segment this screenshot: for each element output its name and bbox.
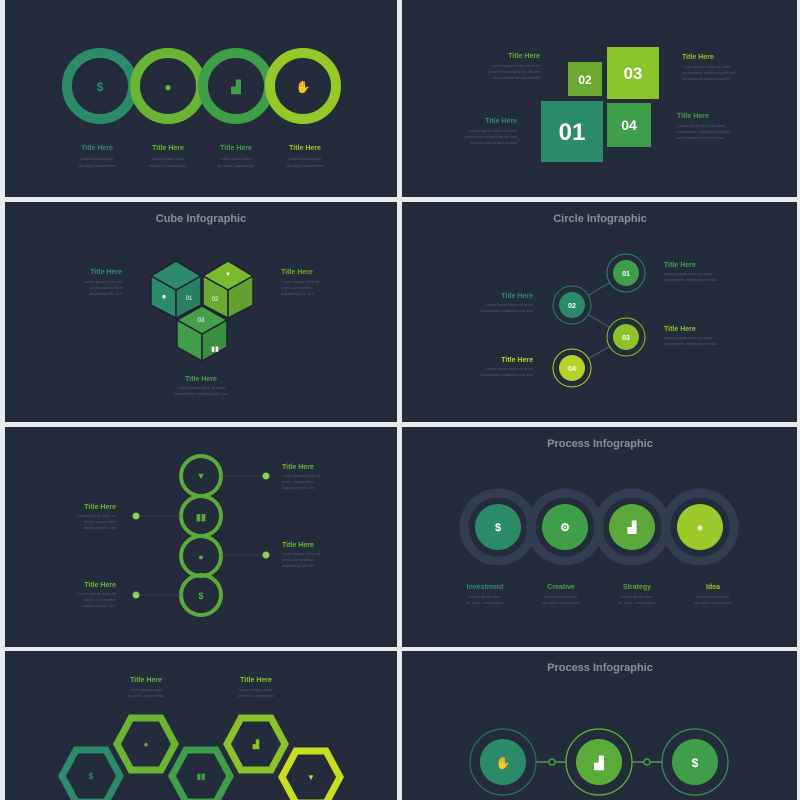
labels: Lorem ipsum dolor xyxy=(151,156,185,161)
labels: sit amet, consectetur xyxy=(467,600,504,605)
panel: hexagons: $ xyxy=(89,772,94,781)
labels: sit amet, consectetur xyxy=(543,600,580,605)
panel: cube infographic: ▮▮ xyxy=(211,346,219,353)
labels: Creative xyxy=(547,584,575,591)
labels: Idea xyxy=(706,584,720,591)
labels: Title Here xyxy=(81,145,113,152)
panel: hexagons: ▮▮ xyxy=(197,772,205,781)
text blocks xyxy=(84,269,320,396)
text blocks: Lorem ipsum dolor sit xyxy=(282,473,321,478)
panel: circle chain xyxy=(5,0,397,197)
squares xyxy=(568,62,602,96)
text blocks: Lorem ipsum dolor sit xyxy=(78,591,117,596)
text blocks: Title Here xyxy=(664,262,696,269)
text blocks: Title Here xyxy=(90,269,122,276)
panel: circle infographic: 01 xyxy=(622,271,630,278)
text blocks: consectetur adipiscing elit sed xyxy=(487,69,540,74)
text blocks: consectetur adipiscing elit sed xyxy=(664,341,717,346)
text blocks: Lorem ipsum dolor sit amet xyxy=(485,302,534,307)
icons: ▟ xyxy=(230,79,241,95)
panel: process infographic 2: ✋ xyxy=(496,756,510,770)
text blocks: Lorem ipsum dolor sit amet xyxy=(485,366,534,371)
text blocks: Title Here xyxy=(677,113,709,120)
labels: sit amet, consectetur xyxy=(79,163,116,168)
circles xyxy=(470,729,728,795)
labels: Lorem ipsum dolor xyxy=(288,156,322,161)
text blocks xyxy=(78,464,321,608)
panel: process infographic: ● xyxy=(697,522,703,534)
panel: vertical chain: ▼ xyxy=(197,471,205,481)
text blocks: consectetur adipiscing elit, sed xyxy=(174,391,228,396)
panel: hexagons: ▟ xyxy=(252,739,260,750)
panel: circle infographic: 03 xyxy=(622,335,630,342)
panel: vertical chain: $ xyxy=(198,591,204,601)
labels: sit amet, consectetur xyxy=(619,600,656,605)
labels: Lorem ipsum dolor xyxy=(80,156,114,161)
panel: square grid: 02 xyxy=(578,73,592,87)
labels: sit amet, consectetur xyxy=(150,163,187,168)
text blocks: Title Here xyxy=(282,464,314,471)
panel: cube infographic: 02 xyxy=(212,297,219,303)
labels: Lorem ipsum dolor xyxy=(544,594,578,599)
panel: circle infographic: 04 xyxy=(568,366,576,373)
labels: sit amet, consectetur xyxy=(218,163,255,168)
panel: circle infographic xyxy=(402,202,797,422)
text blocks: consectetur adipiscing elit sed xyxy=(664,277,717,282)
text blocks: amet, consectetur xyxy=(281,285,313,290)
text blocks: sit amet, consectetur xyxy=(238,693,275,698)
text blocks: Lorem ipsum dolor sit amet xyxy=(677,123,726,128)
icons: ● xyxy=(164,80,172,94)
panel: cube infographic: 03 xyxy=(198,318,205,324)
labels: Title Here xyxy=(152,145,184,152)
panel: square grid: 04 xyxy=(621,117,637,133)
text blocks: consectetur adipiscing elit sed xyxy=(682,70,735,75)
panel: process infographic: ▟ xyxy=(627,520,637,534)
labels: Lorem ipsum dolor xyxy=(219,156,253,161)
text blocks: amet, consectetur xyxy=(84,519,117,524)
text blocks: Title Here xyxy=(84,504,116,511)
text blocks: amet, consectetur xyxy=(90,285,123,290)
chain rings xyxy=(181,456,221,615)
labels: Lorem ipsum dolor xyxy=(696,594,730,599)
text blocks: Lorem ipsum dolor sit amet xyxy=(177,385,226,390)
text blocks: adipiscing elit, sed xyxy=(89,291,122,296)
text blocks: Lorem ipsum dolor sit xyxy=(78,513,117,518)
labels xyxy=(467,584,732,605)
labels: sit amet, consectetur xyxy=(695,600,732,605)
connectors xyxy=(572,273,626,368)
panel: process infographic 2 xyxy=(402,651,797,800)
panel: vertical chain: ▮▮ xyxy=(196,512,206,522)
panel: process infographic: ⚙ xyxy=(560,522,570,534)
panel: hexagons: ▼ xyxy=(307,773,315,782)
labels: Title Here xyxy=(220,145,252,152)
text blocks: Title Here xyxy=(508,53,540,60)
text blocks: Title Here xyxy=(664,326,696,333)
heading: Process Infographic xyxy=(547,662,653,674)
text blocks: adipiscing elit, sed xyxy=(282,563,315,568)
text blocks: Lorem ipsum dolor sit xyxy=(281,279,320,284)
heading: Process Infographic xyxy=(547,438,653,450)
text blocks: adipiscing elit, sed xyxy=(83,603,116,608)
connectors xyxy=(536,759,663,765)
panel: cube infographic: 01 xyxy=(186,296,193,302)
heading: Cube Infographic xyxy=(156,213,246,225)
text blocks: Lorem ipsum dolor sit amet xyxy=(664,271,713,276)
panel: cube infographic: ▼ xyxy=(225,272,231,278)
circles xyxy=(553,254,645,387)
text blocks: adipiscing elit, sed xyxy=(282,485,315,490)
labels: Investment xyxy=(467,584,504,591)
text blocks: Title Here xyxy=(240,677,272,684)
panel: process infographic: $ xyxy=(495,522,501,534)
text blocks: do eiusmod tempor incidid xyxy=(682,76,729,81)
text blocks: amet, consectetur xyxy=(282,479,314,484)
pointer lines and dots xyxy=(136,476,266,595)
text blocks: Lorem ipsum dolor sit amet xyxy=(664,335,713,340)
text blocks: do eiusmod tempor incidid xyxy=(677,135,724,140)
text blocks: Lorem ipsum dolor sit xyxy=(84,279,123,284)
labels: Lorem ipsum dolor xyxy=(468,594,502,599)
text blocks: Lorem ipsum dolor sit amet xyxy=(682,64,731,69)
panel: cube infographic: ● xyxy=(162,292,167,301)
panel: vertical chain xyxy=(5,427,397,647)
icons: ✋ xyxy=(296,80,310,94)
panel: cube infographic xyxy=(5,202,397,422)
labels xyxy=(79,145,324,168)
panel: process infographic xyxy=(402,427,797,647)
labels: Lorem ipsum dolor xyxy=(620,594,654,599)
hexagon outlines xyxy=(62,718,340,800)
text blocks: adipiscing elit, sed xyxy=(83,525,116,530)
text blocks: Title Here xyxy=(281,269,313,276)
text blocks: sit amet, consectetur xyxy=(128,693,165,698)
text blocks: Title Here xyxy=(282,542,314,549)
text blocks: Lorem ipsum dolor xyxy=(129,687,163,692)
heading: Circle Infographic xyxy=(553,213,647,225)
text blocks xyxy=(480,262,717,377)
rings xyxy=(464,493,734,561)
text blocks: adipiscing elit, sed xyxy=(281,291,314,296)
text blocks: Title Here xyxy=(501,357,533,364)
rings xyxy=(67,53,336,119)
panel: hexagons: ● xyxy=(144,740,149,749)
panel: process infographic 2: $ xyxy=(692,756,699,770)
text blocks: Lorem ipsum dolor sit amet xyxy=(492,63,541,68)
text blocks: do eiusmod tempor incidid xyxy=(470,140,517,145)
icons xyxy=(97,79,310,95)
text blocks: consectetur adipiscing elit sed xyxy=(480,372,533,377)
text blocks: consectetur adipiscing elit sed xyxy=(480,308,533,313)
panel: square grid: 01 xyxy=(559,119,585,146)
panel: hexagons xyxy=(5,651,397,800)
panel: square grid: 03 xyxy=(624,64,642,83)
labels: Title Here xyxy=(289,145,321,152)
panel: square grid xyxy=(402,0,797,197)
text blocks: consectetur adipiscing elit sed xyxy=(464,134,517,139)
text blocks: Title Here xyxy=(84,582,116,589)
text blocks: Lorem ipsum dolor sit amet xyxy=(469,128,518,133)
panel: process infographic 2: ▟ xyxy=(593,755,604,771)
panel: vertical chain: ● xyxy=(198,552,204,562)
text blocks: Title Here xyxy=(501,293,533,300)
text blocks: amet, consectetur xyxy=(282,557,314,562)
text blocks: Lorem ipsum dolor sit xyxy=(282,551,321,556)
text blocks xyxy=(464,53,735,145)
cubes xyxy=(151,261,253,361)
icons: $ xyxy=(97,80,104,94)
labels: Strategy xyxy=(623,584,651,591)
text blocks: consectetur adipiscing elit sed xyxy=(677,129,730,134)
text blocks: do eiusmod tempor incidid xyxy=(493,75,540,80)
text blocks: Title Here xyxy=(485,118,517,125)
text blocks xyxy=(128,677,275,698)
panel: circle infographic: 02 xyxy=(568,303,576,310)
text blocks: Title Here xyxy=(130,677,162,684)
labels: sit amet, consectetur xyxy=(287,163,324,168)
text blocks: amet, consectetur xyxy=(84,597,117,602)
text blocks: Lorem ipsum dolor xyxy=(239,687,273,692)
text blocks: Title Here xyxy=(682,54,714,61)
text blocks: Title Here xyxy=(185,376,217,383)
